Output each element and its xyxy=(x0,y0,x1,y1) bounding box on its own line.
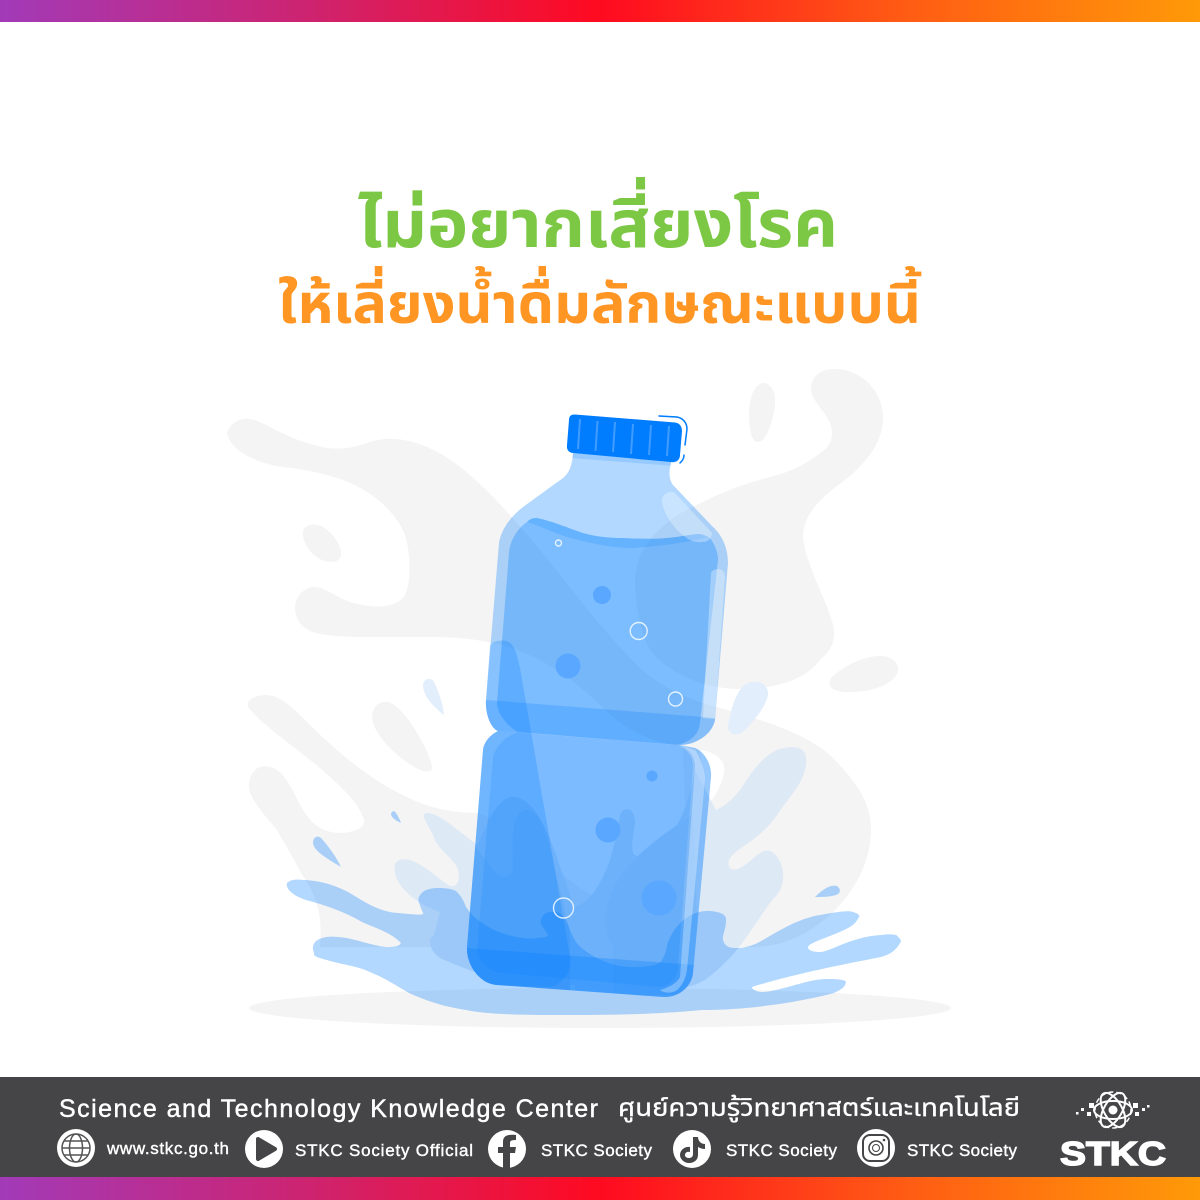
water bottle xyxy=(460,414,735,1005)
ring bubbles xyxy=(554,540,682,918)
top gradient bar xyxy=(0,0,1200,22)
title line 1: ไม่อยากเสี่ยงโรค xyxy=(358,177,838,262)
white gap beside the bottle xyxy=(700,750,724,805)
icon: instagram xyxy=(857,1129,895,1167)
upper bottom band xyxy=(486,700,716,745)
bottom gradient bar xyxy=(0,1177,1200,1200)
neck shadow xyxy=(572,453,672,466)
footer heading thai: ศูนย์ความรู้วิทยาศาสตร์และเทคโนโลยี xyxy=(618,1094,1020,1123)
logo wordmark: STKC xyxy=(1060,1135,1166,1172)
dark bubbles xyxy=(556,586,676,916)
icon: tiktok xyxy=(673,1130,711,1168)
bottle lower segment xyxy=(467,731,712,997)
icon: facebook xyxy=(488,1130,526,1168)
pale blue drops xyxy=(423,679,768,734)
pale blue crown splash behind the bottle xyxy=(394,747,806,995)
bottle cap xyxy=(567,414,682,462)
upper shoulder highlight xyxy=(662,492,712,542)
dark left fold xyxy=(467,641,570,987)
instagram text: STKC Society xyxy=(907,1141,1018,1160)
icon: play xyxy=(245,1130,283,1168)
title xyxy=(278,177,922,335)
tiktok text: STKC Society xyxy=(726,1141,838,1160)
youtube text: STKC Society Official xyxy=(295,1141,473,1160)
lower right highlight xyxy=(660,745,705,993)
small blue droplets xyxy=(313,811,840,897)
footer panel xyxy=(0,1077,1200,1177)
logo mark xyxy=(1076,1089,1150,1131)
cap sparkle xyxy=(659,416,687,463)
footer heading english: Science and Technology Knowledge Center xyxy=(59,1095,598,1123)
water surface xyxy=(527,518,708,548)
illustration: grey splash background xyxy=(227,369,951,1028)
lower bottom band xyxy=(460,948,695,1000)
front water splash xyxy=(287,880,901,1015)
facebook text: STKC Society xyxy=(541,1141,652,1160)
bottle upper segment xyxy=(480,445,735,750)
right side highlight xyxy=(703,569,725,719)
water body xyxy=(497,518,718,745)
lower water xyxy=(477,732,693,987)
title line 2: ให้เลี่ยงน้ำดื่มลักษณะแบบนี้ xyxy=(278,265,922,335)
website text: www.stkc.go.th xyxy=(106,1139,229,1158)
icon: globe xyxy=(57,1129,95,1167)
